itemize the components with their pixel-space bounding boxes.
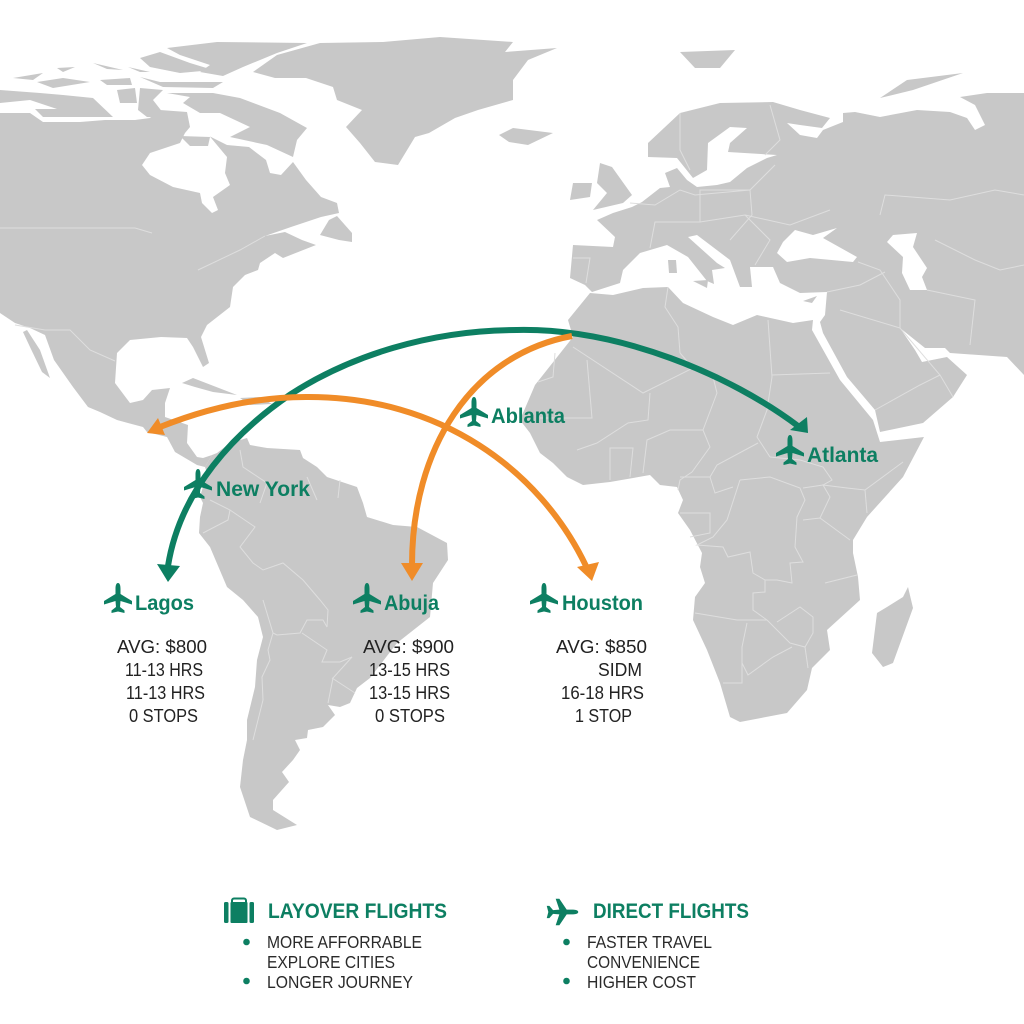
bullet list: layover flights: [243, 932, 422, 992]
world map: [0, 37, 1024, 830]
bullet list: direct flights: [563, 932, 712, 992]
Hudson Bay: [142, 133, 230, 213]
flight arc: orange route to Houston: [147, 397, 599, 581]
icon: plane Abuja: [353, 583, 381, 613]
bullet list: direct flights: HIGHER COST: [587, 972, 696, 992]
landmass: Novaya Zemlya: [880, 73, 963, 98]
arrowhead: orange at Houston: [577, 562, 599, 581]
city name: Lagos: Lagos: [135, 592, 194, 615]
bullet list: layover flights: MORE AFFORRABLE: [267, 932, 422, 952]
arrowhead: green at Atlanta: [790, 417, 808, 433]
stats: Lagos: 0 STOPS: [129, 706, 198, 726]
legend: direct flights: [547, 899, 749, 992]
Aegean Sea islands gap: [750, 267, 776, 287]
column: Abuja: [353, 583, 454, 726]
label: New York: New York: [216, 478, 310, 501]
landmass: Eurasia: [570, 93, 1024, 432]
icon: suitcase: [224, 898, 254, 923]
Caspian Sea: [887, 233, 927, 290]
landmass: Iceland: [499, 128, 553, 145]
bullet list: direct flights: CONVENIENCE: [587, 952, 700, 972]
arrowhead: orange at Central America: [147, 418, 165, 435]
stats: Lagos: [117, 637, 207, 726]
bullet list: layover flights: EXPLORE CITIES: [267, 952, 395, 972]
stats: Abuja: AVG: $900: [363, 637, 454, 657]
stats: Houston: 1 STOP: [575, 706, 632, 726]
country borders: [0, 105, 1024, 740]
landmass: North America: [0, 110, 339, 467]
column: Houston: [530, 583, 647, 726]
landmass: South America: [199, 438, 448, 830]
stats: Houston: SIDM: [598, 660, 642, 680]
stats: Abuja: 0 STOPS: [375, 706, 445, 726]
icon: plane Houston: [530, 583, 558, 613]
heading: layover flights: LAYOVER FLIGHTS: [268, 900, 447, 923]
city name: Abuja: Abuja: [384, 592, 439, 615]
arrowhead: orange at Abuja: [401, 563, 423, 581]
stats: Houston: 16-18 HRS: [561, 683, 644, 703]
column: Lagos: [104, 583, 207, 726]
stats: Lagos: 11-13 HRS: [126, 683, 205, 703]
bullet list: layover flights: LONGER JOURNEY: [267, 972, 413, 992]
stats: Lagos: AVG: $800: [117, 637, 207, 657]
landmass: Baja California: [23, 330, 50, 378]
label: Ablanta: Ablanta: [491, 405, 565, 428]
landmass: Africa: [520, 287, 924, 722]
landmass: Arctic islands: [0, 42, 307, 157]
landmass: Madagascar: [872, 587, 913, 667]
icon: plane Lagos: [104, 583, 132, 613]
flight arc: green route to Atlanta: [157, 330, 808, 582]
landmass: Newfoundland: [320, 216, 352, 242]
city name: Houston: Houston: [562, 592, 643, 615]
landmass: British Isles: [570, 163, 632, 210]
stats: Abuja: 13-15 HRS: [369, 660, 450, 680]
Black Sea: [777, 228, 857, 262]
flight arc: orange route to Abuja: [401, 336, 572, 581]
stats: Lagos: 11-13 HRS: [125, 660, 203, 680]
arrowhead: green at Lagos: [157, 564, 180, 582]
label: Atlanta: Atlanta: [807, 444, 878, 467]
legend: layover flights: [224, 898, 447, 992]
landmass: Caribbean islands: [182, 378, 272, 405]
landmass: Mediterranean islands: [668, 260, 817, 303]
label: Ablanta: [460, 397, 565, 428]
label: Atlanta: [776, 435, 878, 467]
label: New York: [184, 469, 310, 501]
stats: Abuja: [363, 637, 454, 726]
stats: Abuja: 13-15 HRS: [369, 683, 450, 703]
stats: Houston: AVG: $850: [556, 637, 647, 657]
landmass: Svalbard: [680, 50, 735, 68]
landmass: Greenland: [253, 37, 557, 165]
heading: direct flights: DIRECT FLIGHTS: [593, 900, 749, 923]
landmass: Southampton Island: [180, 136, 210, 146]
icon: plane direct: [547, 899, 578, 925]
bullet list: direct flights: FASTER TRAVEL: [587, 932, 712, 952]
stats: Houston: [556, 637, 647, 726]
